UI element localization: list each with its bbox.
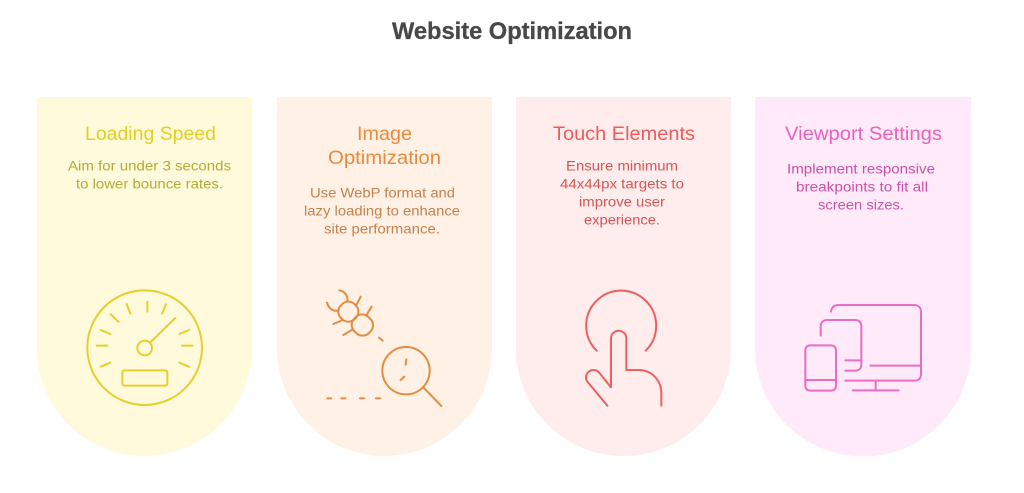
panel background: Image Optimization (277, 97, 492, 456)
heading: Image Optimization: Optimization (328, 147, 441, 169)
text: Viewport Settings description: screen sizes. (818, 196, 904, 212)
text: Touch Elements description: Ensure minimum (566, 157, 678, 173)
heading: Loading Speed: Loading Speed (85, 123, 216, 145)
panel: Loading Speed (37, 97, 252, 456)
text: Image Optimization description: lazy loading to enhance (304, 202, 460, 218)
panel background: Loading Speed (37, 97, 252, 456)
heading: Viewport Settings: Viewport Settings (785, 123, 942, 145)
icon: tapping hand (586, 291, 661, 406)
heading: Image Optimization (328, 123, 441, 169)
text: Touch Elements description: 44x44px targets to (560, 175, 684, 191)
icon: bug and magnifying glass (327, 290, 441, 406)
text: Touch Elements description (560, 157, 684, 227)
text: Viewport Settings description (787, 160, 935, 212)
panel background: Touch Elements (516, 97, 731, 456)
panel: Viewport Settings (755, 97, 971, 456)
text: Loading Speed description: to lower bounce rates. (76, 175, 223, 191)
icon: responsive devices (805, 305, 921, 391)
text: Image Optimization description: Use WebP format and (310, 184, 455, 200)
text: Viewport Settings description: Implement responsive (787, 160, 935, 176)
heading: Image Optimization: Image (357, 123, 412, 145)
panel background: Viewport Settings (755, 97, 971, 456)
title: Website Optimization (392, 18, 632, 45)
text: Loading Speed description: Aim for under 3 seconds (68, 157, 231, 173)
text: Viewport Settings description: breakpoints to fit all (796, 178, 928, 194)
panel: Touch Elements (516, 97, 731, 456)
text: Image Optimization description (304, 184, 460, 236)
text: Loading Speed description (68, 157, 231, 191)
text: Touch Elements description: experience. (584, 211, 660, 227)
text: Image Optimization description: site performance. (324, 220, 440, 236)
icon: speedometer (87, 290, 202, 405)
panel: Image Optimization (277, 97, 492, 456)
heading: Touch Elements: Touch Elements (553, 123, 695, 145)
text: Touch Elements description: improve user (579, 193, 665, 209)
